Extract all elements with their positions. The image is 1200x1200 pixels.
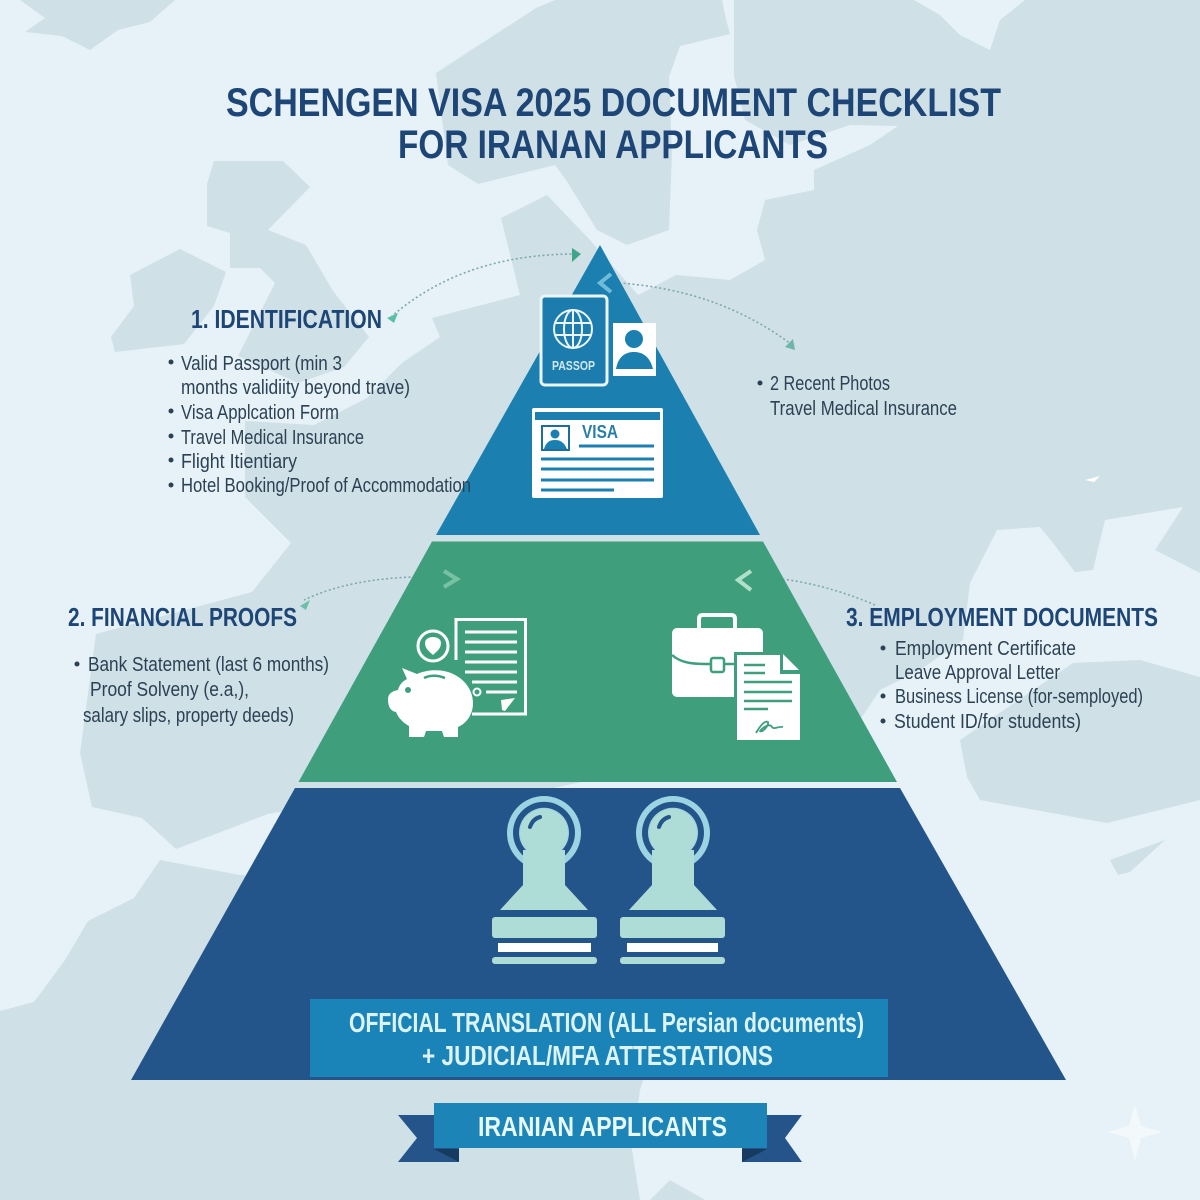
panel: employment documents text	[846, 602, 1158, 733]
panel: employment documents text: Student ID/for students)	[894, 711, 1081, 733]
panel: photos and insurance text: 2 Recent Photos	[770, 373, 890, 395]
icon: visa card	[532, 408, 663, 498]
translation label	[310, 999, 888, 1077]
panel: financial proofs text: Bank Statement (last 6 months)	[88, 654, 329, 676]
panel: financial proofs text	[68, 602, 329, 727]
panel: financial proofs text: 2. FINANCIAL PROOFS	[68, 602, 297, 632]
icon: piggy bank and statement	[388, 620, 526, 737]
panel: identification text: Flight Itientiary	[181, 451, 297, 473]
translation label: OFFICIAL TRANSLATION (ALL Persian documents)	[349, 1007, 864, 1038]
panel: identification text: months validiity beyond trave)	[181, 377, 410, 399]
translation label: + JUDICIAL/MFA ATTESTATIONS	[422, 1040, 773, 1071]
panel: employment documents text: Business License (for-semployed)	[895, 686, 1143, 708]
ribbon banner	[398, 1103, 802, 1162]
panel: employment documents text: Leave Approval Letter	[895, 662, 1060, 684]
panel: identification text: Visa Applcation Form	[181, 402, 339, 424]
icon: passport: PASSOP	[552, 358, 595, 373]
panel: photos and insurance text	[758, 373, 957, 420]
panel: identification text: Valid Passport (min 3	[181, 353, 342, 375]
panel: identification text: 1. IDENTIFICATION	[191, 304, 382, 334]
icon: photo	[613, 323, 656, 376]
title	[226, 81, 1001, 167]
dotted connector arrows	[300, 248, 875, 610]
panel: employment documents text: Employment Certificate	[895, 638, 1076, 660]
panel: identification text: Hotel Booking/Proof of Accommodation	[181, 475, 471, 497]
icon: left chevron	[444, 571, 457, 587]
title: SCHENGEN VISA 2025 DOCUMENT CHECKLIST	[226, 81, 1001, 125]
pyramid tier 3: translation and attestations	[131, 788, 1066, 1080]
icon: passport	[541, 296, 607, 385]
title: FOR IRANAN APPLICANTS	[398, 123, 828, 167]
icon: stamp right	[620, 796, 725, 964]
panel: photos and insurance text: Travel Medical Insurance	[770, 398, 957, 420]
panel: financial proofs text: salary slips, property deeds)	[83, 705, 294, 727]
icon: chevron	[600, 274, 611, 292]
icon: visa card: VISA	[582, 422, 618, 442]
panel: identification text	[168, 304, 471, 497]
icon: stamp left	[492, 796, 597, 964]
pyramid tier 1: identification	[436, 245, 760, 535]
panel: financial proofs text: Proof Solveny (e.a,),	[90, 679, 249, 701]
icon: briefcase and signed letter	[672, 615, 802, 742]
panel: identification text: Travel Medical Insurance	[181, 427, 364, 449]
icon: right chevron	[738, 571, 751, 590]
pyramid tier 2: finances and employment	[298, 542, 897, 782]
ribbon banner: IRANIAN APPLICANTS	[478, 1111, 727, 1142]
